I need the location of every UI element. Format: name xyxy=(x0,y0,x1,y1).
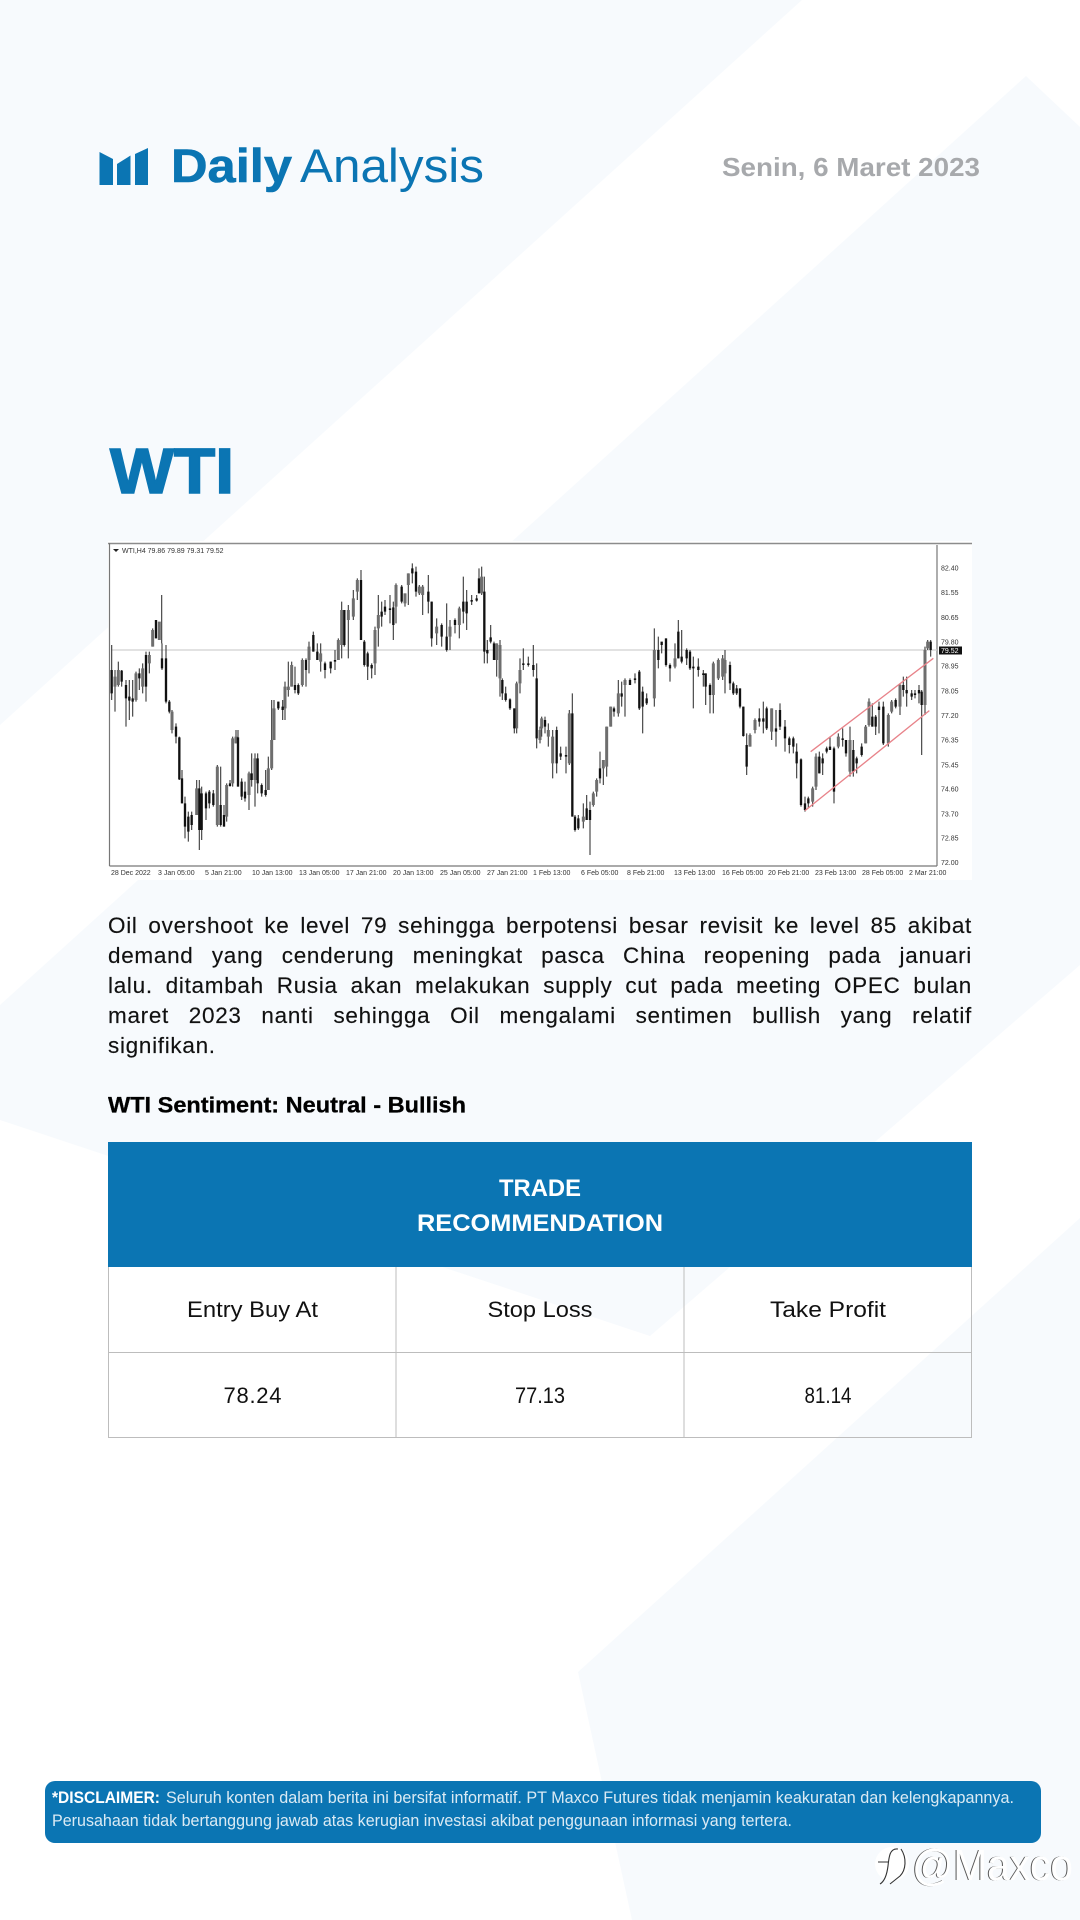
trade values xyxy=(224,1383,852,1408)
price axis labels: 76.35 xyxy=(941,738,959,744)
price axis labels: 72.85 xyxy=(941,836,959,842)
analysis paragraph: maret 2023 nanti sehingga Oil mengalami sentimen bullish yang relatif xyxy=(108,1003,972,1028)
date: Senin, 6 Maret 2023 xyxy=(722,152,980,182)
time axis labels: 13 Feb 13:00 xyxy=(674,870,715,877)
time axis labels: 17 Jan 21:00 xyxy=(346,870,387,877)
time axis labels: 1 Feb 13:00 xyxy=(533,870,570,877)
candles: December to early February xyxy=(112,563,540,850)
time axis labels: 20 Jan 13:00 xyxy=(393,870,434,877)
logo wordmark xyxy=(171,139,484,192)
candlestick chart: WTI H4 xyxy=(108,542,972,877)
price axis labels: 79.80 xyxy=(941,640,959,646)
time axis labels xyxy=(111,870,946,877)
price axis labels: 74.60 xyxy=(941,786,959,794)
disclaimer box: Seluruh konten dalam berita ini bersifat informatif. PT Maxco Futures tidak menjamin keakuratan dan kelengkapannya. xyxy=(166,1789,1014,1807)
disclaimer box xyxy=(45,1781,1041,1843)
time axis labels: 25 Jan 05:00 xyxy=(440,870,481,877)
price axis labels: 82.40 xyxy=(941,566,959,572)
time axis labels: 28 Feb 05:00 xyxy=(862,870,903,877)
sentiment line: WTI Sentiment: Neutral - Bullish xyxy=(108,1092,466,1118)
table header: TRADE xyxy=(499,1175,581,1202)
price axis labels: 78.05 xyxy=(941,688,959,696)
header logo: Daily Analysis xyxy=(100,139,484,192)
time axis labels: 8 Feb 21:00 xyxy=(627,870,664,877)
price axis labels: 81.55 xyxy=(941,590,959,597)
time axis labels: 5 Jan 21:00 xyxy=(205,870,242,877)
analysis paragraph: Oil overshoot ke level 79 sehingga berpotensi besar revisit ke level 85 akibat xyxy=(108,913,972,938)
price axis labels: 77.20 xyxy=(941,713,959,720)
icon: bar chart logo xyxy=(100,148,148,185)
icon: watermark logo xyxy=(875,1847,909,1884)
time axis labels: 13 Jan 05:00 xyxy=(299,870,340,877)
price axis labels: 73.70 xyxy=(941,812,959,818)
time axis labels: 20 Feb 21:00 xyxy=(768,870,809,877)
time axis labels: 27 Jan 21:00 xyxy=(487,870,528,877)
disclaimer box: Perusahaan tidak bertanggung jawab atas kerugian investasi akibat penggunaan informasi yang tertera. xyxy=(52,1812,792,1830)
price axis labels: 75.45 xyxy=(941,762,959,770)
rising channel trend lines xyxy=(805,658,933,811)
price axis labels xyxy=(941,566,959,867)
time axis labels: 16 Feb 05:00 xyxy=(722,870,763,877)
trade recommendation table xyxy=(108,1142,972,1438)
time axis labels: 3 Jan 05:00 xyxy=(158,870,195,877)
time axis labels: 28 Dec 2022 xyxy=(111,870,151,877)
current price tag xyxy=(939,646,962,655)
logo wordmark: Daily xyxy=(171,139,292,192)
candles: February to March xyxy=(542,620,933,855)
price axis labels: 78.95 xyxy=(941,664,959,670)
analysis paragraph: lalu. ditambah Rusia akan melakukan supply cut pada meeting OPEC bulan xyxy=(108,973,972,998)
analysis paragraph: signifikan. xyxy=(108,1033,216,1058)
time axis labels: 2 Mar 21:00 xyxy=(909,870,946,877)
column labels: Take Profit xyxy=(770,1297,887,1322)
price axis labels: 80.65 xyxy=(941,615,959,622)
price line xyxy=(111,649,937,651)
chart header label: WTI,H4 79.86 79.89 79.31 79.52 xyxy=(122,548,224,555)
column labels: Stop Loss xyxy=(488,1297,592,1322)
time axis labels: 10 Jan 13:00 xyxy=(252,870,293,877)
time axis labels: 23 Feb 13:00 xyxy=(815,870,856,877)
trade values: 81.14 xyxy=(804,1383,852,1408)
disclaimer box: *DISCLAIMER: xyxy=(52,1789,160,1807)
logo wordmark: Analysis xyxy=(300,139,484,192)
trade values: 78.24 xyxy=(224,1383,282,1408)
current price tag: 79.52 xyxy=(941,648,959,655)
table header xyxy=(108,1142,972,1267)
analysis paragraph xyxy=(108,913,972,1058)
column labels: Entry Buy At xyxy=(187,1297,319,1322)
time axis labels: 6 Feb 05:00 xyxy=(581,870,618,877)
analysis paragraph: demand yang cenderung meningkat pasca China reopening pada januari xyxy=(108,943,972,968)
price axis labels: 72.00 xyxy=(941,860,959,867)
title: WTI: WTI xyxy=(110,435,234,505)
column labels xyxy=(187,1297,887,1322)
trade values: 77.13 xyxy=(515,1383,565,1408)
table header: RECOMMENDATION xyxy=(417,1210,663,1237)
